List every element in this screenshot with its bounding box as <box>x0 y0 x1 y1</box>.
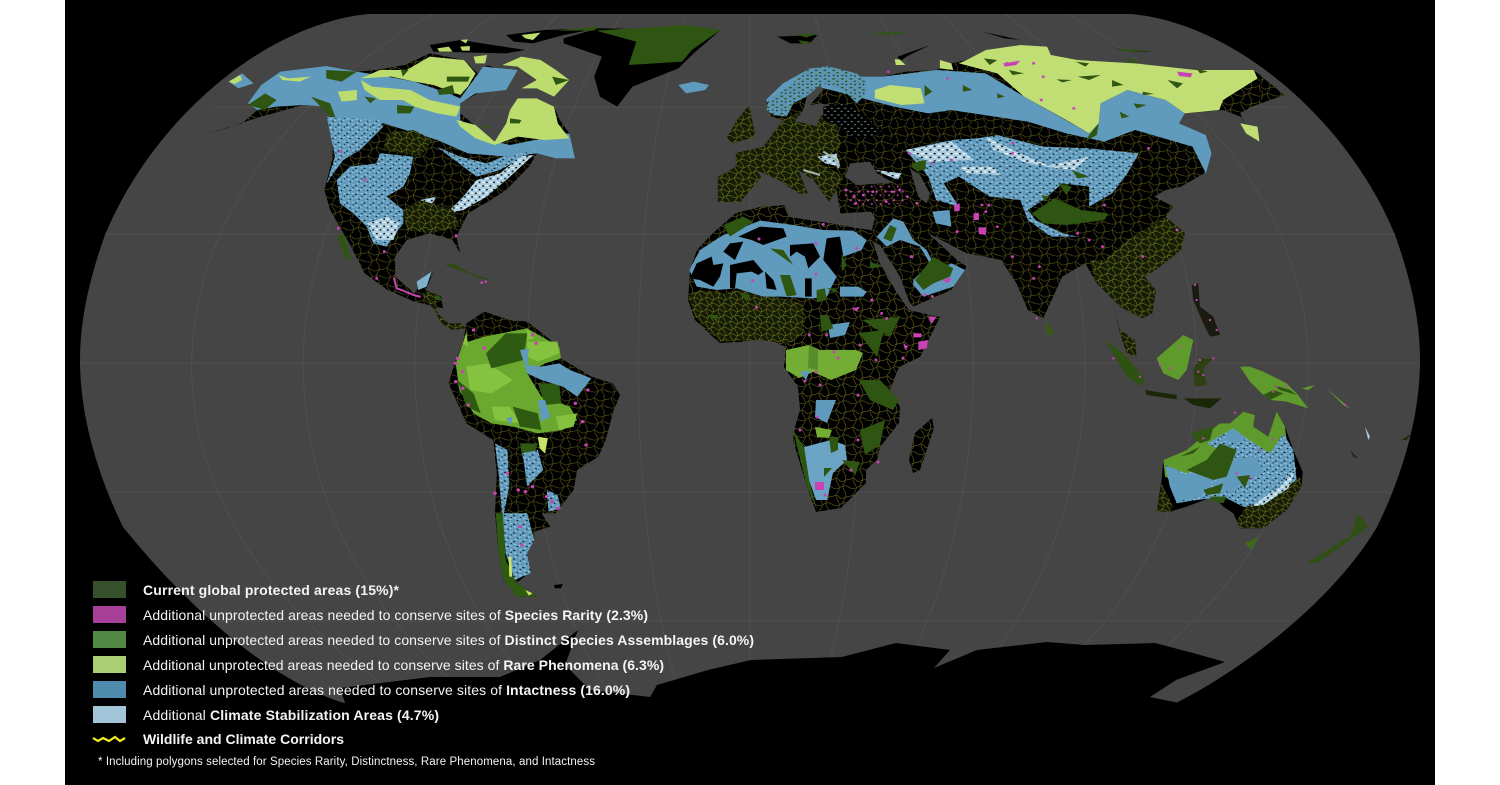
legend item: rare phenomena: Additional unprotected areas needed to conserve sites of Rare Phenomena (6.3%) <box>143 657 664 673</box>
Yucatan <box>417 272 432 290</box>
Central America <box>420 293 466 330</box>
Central Asia intactness <box>905 135 1139 237</box>
Europe corridors <box>718 110 844 202</box>
Black Sea <box>845 162 893 185</box>
Java and Lesser Sunda <box>1145 390 1222 408</box>
Malay Peninsula <box>1115 310 1137 357</box>
central South America protected <box>520 443 538 453</box>
Africa <box>688 205 940 512</box>
Caucasus protected area <box>912 160 927 172</box>
land: North America <box>204 53 575 308</box>
South American rarity sites <box>456 330 588 545</box>
Southeast and southwest Australia <box>1157 477 1302 528</box>
Australia land <box>1157 412 1303 528</box>
Australia protected areas <box>1180 427 1250 503</box>
Iceland <box>678 82 709 93</box>
Australian Alps climate stabilization <box>1250 467 1297 507</box>
Southern Cone intactness <box>495 443 561 580</box>
legend item: climate stabilization: Additional Climate Stabilization Areas (4.7%) <box>143 707 439 723</box>
footnote: * Including polygons selected for Species Rarity, Distinctness, Rare Phenomena, and Intactness <box>98 756 595 768</box>
Amazon lighter distinct species <box>463 328 577 430</box>
Sahara unprotected blocks <box>690 227 843 297</box>
Madagascar <box>909 418 934 473</box>
graticule <box>80 14 1420 703</box>
Mexican rarity sites <box>394 278 420 297</box>
Great Plains corridors <box>383 130 460 233</box>
Caspian Sea <box>910 168 930 203</box>
Chukotka tip <box>229 73 254 88</box>
New Zealand <box>1307 513 1368 563</box>
Newfoundland <box>557 143 573 158</box>
Eurasia <box>718 32 1284 318</box>
Borneo <box>1157 335 1193 380</box>
Pantanal rare phenomena <box>538 437 548 453</box>
Sahara intactness <box>689 221 867 298</box>
legend item: intactness: Additional unprotected areas needed to conserve sites of Intactness (16.0%) <box>143 682 630 698</box>
land: Eurasia <box>718 45 1284 318</box>
Sahara, Sahel and Arabia detail <box>688 217 965 350</box>
Appalachian climate stabilization <box>420 155 533 213</box>
boreal intactness <box>248 66 575 158</box>
Central America and South America <box>420 293 620 597</box>
Sulawesi <box>1193 358 1213 387</box>
United States and Mexico detail <box>327 117 573 300</box>
New Guinea <box>1240 367 1308 408</box>
legend item: species rarity: Additional unprotected areas needed to conserve sites of Species Rarity (2.3%) <box>143 607 648 623</box>
Bismarck and Solomon islands <box>1302 385 1350 408</box>
Greenland protected area <box>556 25 720 65</box>
Philippines <box>1192 283 1220 337</box>
land: Africa <box>688 205 940 512</box>
Tasmania <box>1245 537 1258 550</box>
Siberia rare phenomena <box>875 45 1259 142</box>
legend item: distinct species assemblages: Additional unprotected areas needed to conserve sites of Distinct Species Assemblages (6.0%) <box>143 632 754 648</box>
Sahara rarity dots <box>753 224 932 335</box>
land: South America <box>449 312 620 597</box>
Red Sea <box>873 242 910 312</box>
Central America dark forest <box>427 292 442 300</box>
Eastern Europe speckled forest <box>823 103 883 138</box>
North American rarity sites <box>338 152 456 278</box>
Central Africa intactness <box>800 322 850 423</box>
Sudan intactness <box>840 287 867 297</box>
arctic islands rare phenomena <box>437 33 541 52</box>
legend item: corridors: Wildlife and Climate Corridors <box>143 731 344 747</box>
Novaya Zemlya rare phenomena <box>895 59 905 65</box>
Amazon intactness <box>506 348 591 425</box>
western North America intactness <box>337 153 413 247</box>
large species rarity sites <box>954 61 1192 235</box>
Amazon protected areas <box>457 333 561 430</box>
Falkland Islands <box>554 584 563 588</box>
Australia distinct species <box>1163 412 1288 487</box>
Greenland <box>564 28 720 107</box>
Climate stabilization streaks <box>817 137 1089 180</box>
Australia central intactness solid <box>1167 428 1263 502</box>
Sri Lanka <box>1046 322 1054 337</box>
Sahara protected areas <box>708 217 883 332</box>
Novaya Zemlya <box>898 45 930 62</box>
Scandinavia mixed intactness <box>767 66 867 117</box>
boreal intactness <box>766 67 1212 173</box>
Hispaniola sites <box>482 278 486 287</box>
Turkey species rarity <box>842 183 910 207</box>
Cuba <box>445 263 497 282</box>
Southeast Asia and Oceania <box>1037 283 1412 563</box>
Horn of Africa rarity sites <box>852 307 937 350</box>
North America and Greenland <box>204 25 720 308</box>
Iran intactness <box>932 210 951 227</box>
Great Lakes mixed forest <box>437 147 537 177</box>
West Africa corridors <box>688 290 803 343</box>
New Caledonia and Fiji <box>1350 433 1412 458</box>
Siberia protected areas <box>925 58 1208 142</box>
arctic islands <box>430 28 598 53</box>
Patagonia rare phenomena <box>509 557 532 596</box>
small distinct area <box>815 427 832 438</box>
Asian species rarity sites <box>844 63 1177 278</box>
Congo distinct species <box>786 345 863 380</box>
Russia corridors band <box>883 117 1010 150</box>
Patagonia protected edge <box>496 513 538 597</box>
Oceania rarity sites <box>1037 285 1345 478</box>
Southeast Asia and China green corridors <box>1089 217 1185 318</box>
southwest climate stabilization <box>367 217 400 240</box>
Tibet protected area <box>911 160 1108 225</box>
Arabia protected areas <box>883 225 953 290</box>
UK and Ireland <box>726 105 755 143</box>
legend item: current protected areas: Current global protected areas (15%)* <box>143 582 400 598</box>
New Guinea dark highlands <box>1263 385 1297 400</box>
Balkan pale corridor <box>803 152 838 175</box>
northwest Canada mixed forest <box>327 117 383 183</box>
Congo centre <box>808 345 818 370</box>
African species rarity sites <box>815 482 824 490</box>
Arabia intactness <box>877 218 965 297</box>
Southern Africa intactness <box>804 440 847 500</box>
Arabia rarity site <box>942 277 952 283</box>
Africa protected areas <box>793 317 900 510</box>
Antarctica <box>340 630 1225 785</box>
Chukotka rare phenomena <box>229 75 242 84</box>
North America protected areas <box>248 70 569 260</box>
Vanuatu <box>1365 427 1370 440</box>
Svalbard and arctic protected areas <box>794 32 1152 52</box>
Amazon distinct species <box>456 328 577 433</box>
Arctic islands <box>777 32 1152 52</box>
Australia intactness <box>1165 428 1297 510</box>
African rarity dots <box>800 345 903 495</box>
Europe detail <box>767 66 1010 207</box>
Baltic Sea <box>795 85 838 127</box>
boreal rare phenomena <box>278 55 569 145</box>
Sumatra <box>1105 340 1143 387</box>
map ocean <box>80 14 1420 703</box>
legend <box>93 581 754 768</box>
